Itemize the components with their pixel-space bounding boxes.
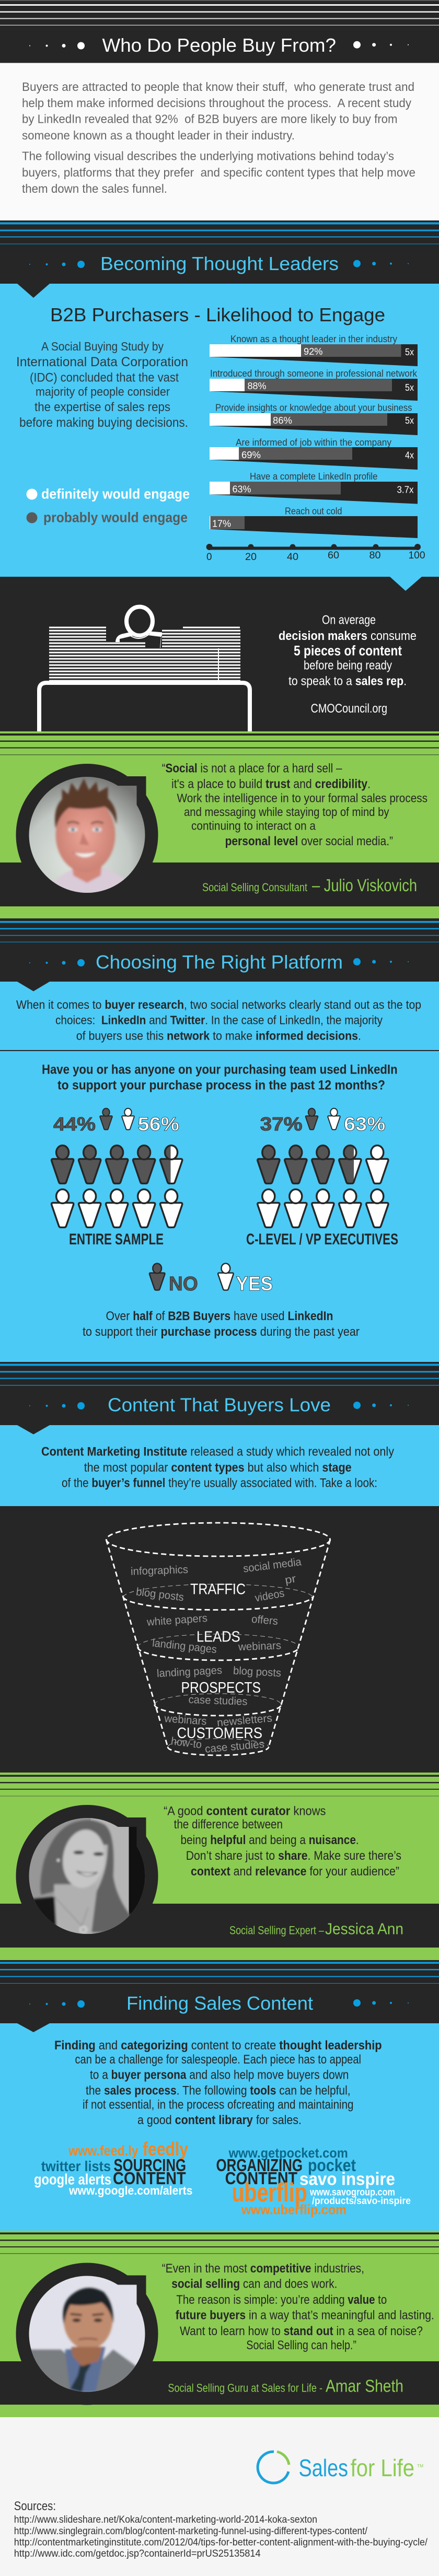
percent headers executives: 37%	[260, 1113, 303, 1135]
intro text	[22, 80, 415, 195]
bar row: linkedin profile	[210, 471, 418, 504]
panel: five pieces of content	[0, 577, 439, 731]
statistic text: On average	[322, 613, 376, 627]
platform intro text: of buyers use this network to make informed decisions.	[76, 1029, 361, 1043]
word cloud: organizing content: pocket	[308, 2155, 356, 2175]
funnel content type labels: blog posts	[233, 1665, 282, 1679]
quote text: “Even in the most competitive industries,	[162, 2262, 364, 2276]
logo: sales for life: TM	[417, 2464, 423, 2468]
bar row: job: 69%	[241, 450, 261, 460]
quote text: it's a place to build trust and credibility.	[171, 777, 371, 791]
word cloud: sourcing content: SOURCING	[114, 2155, 186, 2175]
word cloud: organizing content: www.getpocket.com	[228, 2145, 348, 2161]
statistic text: 5 pieces of content	[294, 643, 402, 659]
panel: finding sales content	[0, 1960, 439, 2231]
quote text: the difference between	[174, 1817, 283, 1832]
word cloud: organizing content	[216, 2145, 411, 2217]
funnel diagram	[106, 1523, 330, 1755]
finding content text: Finding and categorizing content to create thought leadership	[54, 2038, 382, 2053]
legend: definitely would engage	[41, 486, 190, 502]
funnel content type labels: blog posts	[135, 1586, 184, 1604]
funnel stage labels	[177, 1581, 262, 1742]
word cloud: organizing content: www.savogroup.com	[309, 2187, 395, 2198]
heading: becoming thought leaders: Becoming Thought Leaders	[100, 253, 339, 274]
percent headers entire sample: 56%	[138, 1113, 179, 1135]
chart axis: 80	[369, 550, 380, 561]
word cloud: organizing content: CONTENT	[225, 2169, 297, 2188]
funnel content type labels: infographics	[131, 1564, 188, 1578]
word cloud: organizing content: savo inspire	[299, 2170, 395, 2189]
funnel content type labels: pr	[284, 1572, 297, 1587]
chart axis	[206, 544, 425, 563]
bar row: insights: 5x	[405, 415, 414, 426]
quote text: Don’t share just to share. Make sure there’s	[186, 1849, 401, 1863]
quote text	[164, 1804, 401, 1879]
bar row: cold: Reach out cold	[285, 506, 342, 516]
intro text: by LinkedIn revealed that 92% of B2B buyers are more likely to buy from	[22, 112, 397, 126]
portrait: julio viskovich	[16, 764, 158, 906]
percent headers entire sample: 44%	[53, 1113, 96, 1135]
sources: http://www.idc.com/getdoc.jsp?containerId=prUS25135814	[14, 2548, 261, 2559]
chart: entire sample pictogram	[52, 1109, 182, 1248]
legend: probably would engage	[43, 510, 188, 526]
intro text: someone known as a thought leader in their industry.	[22, 129, 295, 142]
top row of executives	[258, 1146, 388, 1183]
quote text	[162, 762, 428, 848]
quote text: social selling can and does work.	[171, 2277, 337, 2291]
sources: http://www.singlegrain.com/blog/content-marketing-funnel-using-different-types-content/	[14, 2526, 368, 2537]
panel: choosing the right platform	[0, 918, 439, 1362]
word cloud: sourcing content: google alerts	[34, 2172, 111, 2188]
word cloud: organizing content: uberflip	[232, 2178, 307, 2207]
attribution: – Julio Viskovich	[312, 876, 417, 895]
icon: person behind paper stacks at monitor	[39, 607, 250, 731]
funnel content type labels: case studies	[188, 1694, 248, 1708]
finding content text: can be a challenge for salespeople. Each piece has to appeal	[75, 2053, 361, 2067]
intro text: buyers, platforms that they prefer and specific content types that help move	[22, 166, 415, 179]
bar row: cold: 17%	[212, 519, 231, 529]
statistic text: to speak to a sales rep.	[288, 674, 407, 689]
bar row: thought leader	[210, 334, 418, 366]
legend	[26, 486, 190, 526]
funnel content type labels: case studies	[204, 1738, 265, 1755]
percent headers executives: 63%	[344, 1113, 386, 1135]
quote text: continuing to interact on a	[191, 819, 316, 833]
panel: b2b purchasers chart	[0, 284, 439, 577]
funnel stage labels: PROSPECTS	[181, 1680, 261, 1696]
bar row: thought leader: Known as a thought leader in ther industry	[230, 334, 397, 344]
funnel content type labels: offers	[251, 1613, 279, 1627]
quote text: Social Selling can help.”	[246, 2338, 356, 2352]
bottom row of people	[52, 1190, 182, 1227]
word cloud: sourcing content: CONTENT	[113, 2169, 186, 2188]
takeaway text: Over half of B2B Buyers have used LinkedIn	[106, 1309, 333, 1323]
takeaway text	[83, 1309, 360, 1339]
section heading dots left	[29, 42, 85, 49]
bar row: job	[210, 437, 418, 470]
content intro text: the most popular content types but also which stage	[84, 1461, 352, 1475]
section heading dots right	[353, 41, 409, 49]
study description: A Social Buying Study by	[41, 340, 164, 353]
survey question: Have you or has anyone on your purchasing team used LinkedIn	[42, 1063, 398, 1077]
quote text: The reason is simple: you’re adding value to	[176, 2293, 387, 2307]
chart axis: 60	[328, 550, 339, 561]
study description: the expertise of sales reps	[34, 400, 170, 414]
chart: c-level pictogram	[246, 1109, 398, 1248]
portrait: amar sheth	[16, 2263, 158, 2405]
bar row: cold	[210, 506, 418, 538]
quote text: “Social is not a place for a hard sell –	[162, 762, 342, 776]
study description: (IDC) concluded that the vast	[30, 371, 179, 385]
chart axis: 0	[206, 552, 212, 563]
chart axis: 40	[287, 552, 298, 563]
funnel stage labels: TRAFFIC	[190, 1581, 246, 1598]
intro text: Buyers are attracted to people that know their stuff, who generate trust and	[22, 80, 414, 94]
takeaway text: to support their purchase process during the past year	[83, 1325, 360, 1339]
word cloud: sourcing content	[34, 2138, 192, 2197]
statistic text: decision makers consume	[279, 629, 417, 643]
word cloud: sourcing content: twitter lists	[41, 2158, 111, 2174]
panel: quote jessica ann	[0, 1773, 439, 1960]
bottom row of executives	[258, 1190, 388, 1227]
bar row: thought leader: 92%	[304, 346, 323, 357]
bar row: job: Are informed of job within the company	[236, 437, 391, 448]
chart axis: 20	[245, 552, 257, 563]
attribution: Amar Sheth	[326, 2376, 403, 2396]
attribution: Jessica Ann	[325, 1920, 403, 1938]
top row of people	[52, 1146, 182, 1183]
word cloud: sourcing content: www.google.com/alerts	[68, 2184, 192, 2197]
quote text: and messaging while staying top of mind by	[184, 805, 389, 819]
survey question: to support your purchase process in the past 12 months?	[57, 1078, 385, 1093]
quote text: Want to learn how to stand out in a sea of noise?	[180, 2324, 423, 2338]
funnel stage labels: CUSTOMERS	[177, 1725, 262, 1742]
funnel content type labels: webinars	[164, 1712, 207, 1728]
platform intro text: choices: LinkedIn and Twitter. In the case of LinkedIn, the majority	[55, 1013, 383, 1027]
bar row: professional network: 88%	[248, 381, 267, 391]
attribution	[202, 876, 417, 895]
content intro text	[41, 1445, 394, 1490]
funnel outline	[106, 1523, 330, 1755]
funnel content type labels: webinars	[238, 1640, 281, 1653]
survey question	[42, 1063, 398, 1093]
intro text: The following visual describes the underlying motivations behind today’s	[22, 149, 394, 162]
panel: content that buyers love	[0, 1362, 439, 1773]
attribution	[229, 1920, 403, 1938]
bar row: professional network: 5x	[405, 382, 414, 393]
bar row: linkedin profile: 63%	[232, 484, 251, 494]
quote text	[162, 2262, 434, 2352]
panel: becoming thought leaders	[0, 220, 439, 284]
funnel content type labels: videos	[254, 1587, 285, 1604]
study description: International Data Corporation	[16, 355, 188, 369]
heading: finding sales content: Finding Sales Content	[126, 1992, 313, 2014]
platform intro text	[16, 998, 421, 1043]
logo: sales for life: Sales	[299, 2454, 348, 2481]
content intro text: Content Marketing Institute released a study which revealed not only	[41, 1445, 394, 1459]
attribution: Social Selling Consultant	[202, 881, 307, 894]
bar row: thought leader: 5x	[405, 347, 414, 357]
quote text: personal level over social media.”	[225, 834, 393, 848]
panel: quote julio viskovich	[0, 731, 439, 918]
sources: http://www.slideshare.net/Koka/content-marketing-world-2014-koka-sexton	[14, 2514, 317, 2525]
bar row: professional network: Introduced through someone in professional network	[210, 368, 418, 379]
word cloud: organizing content: ORGANIZING	[216, 2155, 303, 2175]
statistic text: CMOCouncil.org	[310, 702, 387, 716]
bar row: insights	[210, 402, 418, 435]
logo: sales for life	[258, 2452, 423, 2483]
funnel content type labels: landing pages	[156, 1664, 222, 1680]
heading: content that buyers love: Content That Buyers Love	[108, 1394, 331, 1416]
bar chart	[210, 334, 418, 538]
funnel stage labels: LEADS	[197, 1628, 240, 1645]
finding content text	[54, 2038, 382, 2127]
content intro text: of the buyer’s funnel they’re usually associated with. Take a look:	[62, 1476, 377, 1490]
bar row: professional network	[210, 368, 418, 401]
word cloud: organizing content: /products/savo-inspire	[312, 2196, 411, 2207]
word cloud: sourcing content: www.feed.ly	[68, 2143, 138, 2159]
study description: majority of people consider	[36, 384, 170, 398]
word cloud: organizing content: www.uberflip.com	[241, 2201, 346, 2217]
percent headers executives	[260, 1109, 386, 1135]
sources: Sources:	[14, 2499, 56, 2513]
heading: choosing the right platform: Choosing The Right Platform	[96, 951, 343, 973]
funnel content type labels: white papers	[146, 1612, 208, 1628]
legend: no and yes	[149, 1263, 273, 1295]
panel: footer	[0, 2417, 439, 2576]
legend: no and yes: YES	[236, 1273, 273, 1295]
finding content text: if not essential, in the process ofcreating and maintaining	[83, 2098, 353, 2112]
platform intro text: When it comes to buyer research, two social networks clearly stand out as the top	[16, 998, 421, 1011]
funnel content type labels: social media	[242, 1556, 302, 1575]
finding content text: a good content library for sales.	[137, 2113, 302, 2127]
label: entire sample: ENTIRE SAMPLE	[69, 1231, 164, 1248]
word cloud: sourcing content: feedly	[143, 2138, 188, 2160]
attribution: Social Selling Guru at Sales for Life -	[168, 2381, 322, 2395]
panel: who do people buy from	[0, 0, 439, 220]
quote text: being helpful and being a nuisance.	[181, 1833, 359, 1847]
logo: sales for life: for Life	[351, 2454, 414, 2481]
chart title: B2B Purchasers - Likelihood to Engage	[50, 304, 385, 325]
intro text: them down the sales funnel.	[22, 182, 167, 195]
study description: before making buying decisions.	[19, 415, 188, 430]
panel: quote amar sheth	[0, 2231, 439, 2417]
funnel content type labels	[131, 1556, 302, 1755]
legend: no and yes: NO	[169, 1273, 198, 1295]
percent headers entire sample	[53, 1109, 179, 1135]
bar row: linkedin profile: Have a complete LinkedIn profile	[250, 471, 377, 482]
statistic text	[279, 613, 417, 716]
bar row: insights: 86%	[273, 415, 292, 426]
finding content text: the sales process. The following tools can be helpful,	[86, 2083, 351, 2097]
funnel content type labels: landing pages	[152, 1637, 217, 1656]
bar row: job: 4x	[405, 450, 414, 461]
chart axis: 100	[409, 550, 425, 561]
finding content text: to a buyer persona and also help move buyers down	[90, 2068, 349, 2082]
quote text: context and relevance for your audience”	[191, 1864, 399, 1879]
statistic text: before being ready	[304, 658, 392, 673]
sources	[14, 2499, 428, 2559]
intro text: help them make informed decisions throughout the process. A recent study	[22, 96, 411, 110]
study description	[16, 340, 188, 430]
funnel inner back edges	[123, 1584, 313, 1747]
portrait: jessica ann	[16, 1805, 158, 1947]
quote text: “A good content curator knows	[164, 1804, 326, 1818]
bar row: linkedin profile: 3.7x	[397, 485, 414, 495]
attribution	[168, 2376, 403, 2396]
bar row: insights: Provide insights or knowledge about your business	[215, 402, 412, 413]
heading: who do people buy from: Who Do People Buy From?	[102, 34, 336, 56]
funnel content type labels: how-to	[170, 1735, 202, 1751]
attribution: Social Selling Expert –	[229, 1924, 325, 1937]
funnel content type labels: newsletters	[216, 1712, 273, 1729]
